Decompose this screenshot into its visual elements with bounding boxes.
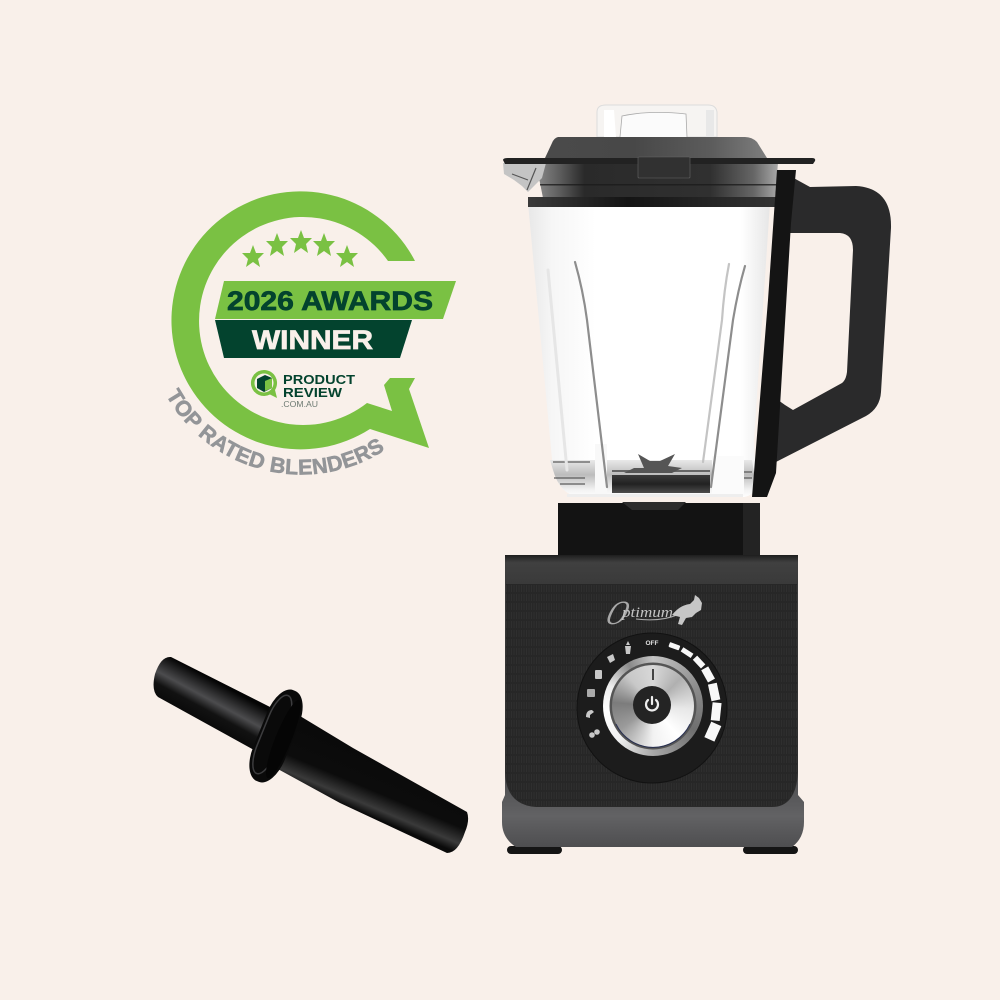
silver knob [603,656,703,756]
product review wordmark: REVIEW [283,385,343,400]
award badge [168,191,456,475]
tamper lower shaft [276,716,468,853]
blender [502,105,891,854]
product review wordmark: .COM.AU [281,399,318,409]
curved caption: top rated blenders: TOP RATED BLENDERS [168,387,384,475]
jar handle [772,176,891,464]
icon: product review logo mark [251,370,277,398]
optimum logo: O [599,595,637,632]
grey base skirt [502,770,804,847]
handle strap [752,170,796,497]
mode icons [586,641,631,738]
motor base [502,555,804,854]
icon: kangaroo [672,595,702,625]
tamper accessory [154,657,468,853]
product review wordmark: PRODUCT [283,372,355,387]
pouring spout collar [503,163,778,207]
power button [633,686,671,724]
brushed panel texture [506,584,797,806]
heading: winner: WINNER [252,325,373,355]
tamper flange [242,684,310,788]
product review wordmark [281,372,355,409]
off label: OFF [646,640,659,647]
blade [624,454,682,473]
optimum logo: ptimum [621,605,673,621]
lid centre tab [638,157,690,178]
base feet [507,846,798,854]
control dial [577,633,727,783]
icon: power symbol [646,697,658,710]
jar inner fins [548,262,745,487]
badge speech-bubble ring [171,191,429,449]
speed segments [668,642,722,742]
jar lid [545,137,767,158]
black front panel [505,555,798,807]
five stars [242,230,358,267]
heading: 2026 awards: 2026 AWARDS [227,286,433,316]
green awards banner [215,281,456,319]
jar base glass [550,444,756,497]
lid rim [503,158,815,164]
tamper upper shaft [154,657,272,750]
optimum logo [599,595,702,632]
measuring cup lid [597,105,717,137]
glass jar body [528,203,770,497]
dial housing [577,633,727,783]
motor coupling [558,502,760,555]
dark winner banner [215,320,412,358]
